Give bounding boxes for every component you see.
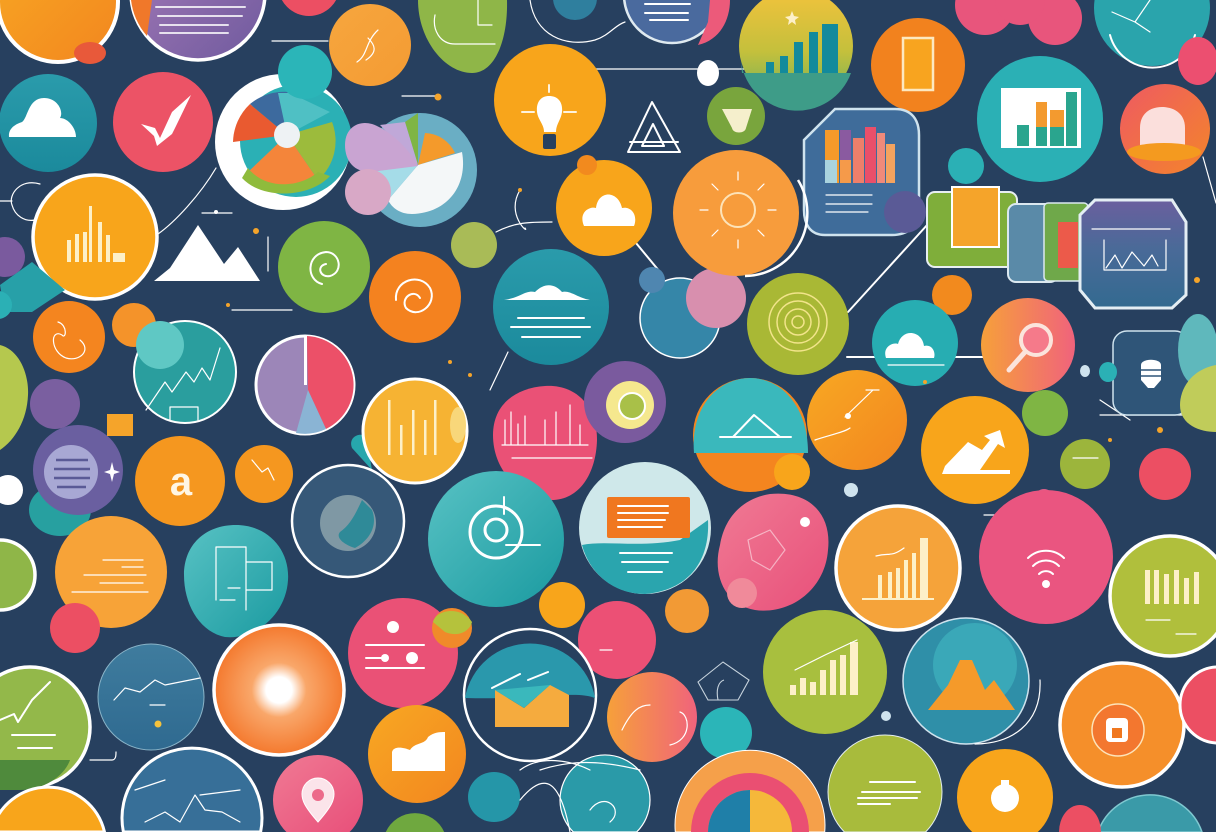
icon: rainbow arc (675, 750, 825, 832)
icon: bars on orange ring circle (836, 506, 960, 630)
translucent overlapping bubbles (639, 267, 746, 358)
scattered dots (214, 94, 1200, 721)
icon: white mountains (154, 225, 260, 281)
icon: pink blob with network (718, 494, 828, 611)
icon: lines on green circle (828, 735, 942, 832)
icon: lamp panel right (1080, 314, 1216, 432)
icon: spiral on green circle (278, 221, 370, 313)
orange circle with letter a: a (170, 460, 193, 504)
icon: triangle outline (628, 102, 680, 152)
icon: document on light blue circle (579, 462, 711, 594)
pastel pie chart (345, 113, 477, 227)
icon: map pin on pink circle (273, 755, 363, 832)
icon: orange peaks on blue teal circle (903, 618, 1040, 744)
icon: cloud on teal circle (0, 74, 97, 172)
left edge green ring and pink circle (0, 540, 100, 653)
icon: bar chart document (804, 109, 984, 235)
icon group: top row circles (0, 0, 730, 86)
icon: bar chart in yellow green circle (739, 0, 853, 111)
icon: square target on orange ring (1060, 663, 1184, 787)
small right circles (1022, 390, 1191, 500)
icon: arrow on orange circle (807, 370, 907, 470)
icon: hard hat on coral circle (1120, 84, 1210, 174)
icon: lines on orange circle (55, 516, 167, 628)
icon: list on purple circle (0, 379, 133, 536)
icon: bar chart panel on teal circle (977, 56, 1103, 182)
icon: target on teal circle (428, 471, 564, 607)
icon: mountain lines on teal circle (493, 249, 609, 365)
pentagon outline (698, 662, 749, 700)
icon: line chart bottom blue ring (122, 748, 262, 832)
icon: cloud on teal circle small (872, 275, 972, 386)
bottom orange ring circle (0, 787, 104, 832)
top right pink and teal circles (955, 0, 1216, 85)
icon: coral bubble (607, 672, 752, 762)
icon: phone on orange circle (871, 18, 965, 112)
icon: floor plan on teal circle (184, 525, 288, 637)
icon: bars on pink circle (493, 386, 597, 500)
icon: purple bubble with target (584, 361, 666, 443)
icon: stopwatch on orange circle (957, 749, 1053, 832)
icon: magnifying glass on coral circle (981, 298, 1075, 392)
icon: growth arrow on orange circle (921, 396, 1029, 504)
icon: sliders on pink circle (348, 598, 472, 708)
icon: line chart on teal circle (134, 321, 236, 423)
icon: roof on orange and teal circle (693, 378, 810, 492)
pie chart with ring (215, 45, 352, 210)
icon: cloud chart on orange circle (368, 705, 466, 803)
icon: light bulb on orange circle (494, 44, 606, 156)
icon: cloud on orange circle (556, 155, 652, 256)
center small circles (539, 582, 709, 679)
icon: sun on orange circle (673, 150, 807, 276)
bottom edge green circle (386, 813, 444, 832)
icon: bars on green ring circle (1110, 536, 1216, 656)
icon: spiral on orange circle (369, 222, 497, 343)
left edge shapes (0, 237, 65, 450)
icon: line chart on blue circle (98, 644, 204, 750)
small orange pair (33, 301, 156, 373)
icon: bars on orange circle (33, 175, 157, 299)
icon: bottom linked lines (468, 755, 650, 832)
pie chart purple and pink (256, 336, 354, 434)
icon: target on green circle (747, 273, 849, 375)
small orange circle with trend (235, 445, 293, 503)
icon: bars on green circle (763, 610, 887, 734)
right edge bottom shapes (1059, 667, 1216, 832)
icon: check mark on pink circle (113, 72, 213, 172)
glowing orange circle (214, 625, 344, 755)
icon: small green circle with hat (707, 87, 765, 145)
orange circle with letter a (135, 436, 225, 526)
icon: dark gauge circle (292, 465, 404, 577)
icon: line chart on green ring (0, 667, 90, 790)
icon: bars on yellow circle (351, 379, 467, 483)
icon: wifi on pink circle (979, 489, 1113, 624)
icon: envelope chart ring (464, 629, 596, 761)
icon: linked hexagon panels (927, 187, 1186, 308)
